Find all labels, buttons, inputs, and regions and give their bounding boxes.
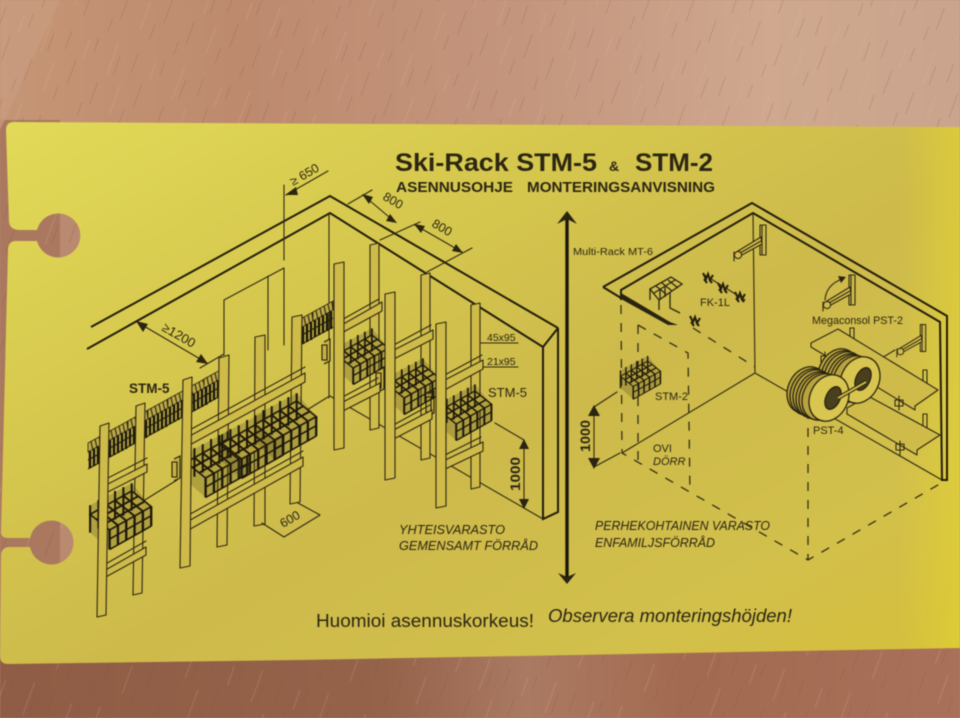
caption: family storage: [595, 518, 770, 550]
dimension: 800 spacing: [348, 189, 472, 272]
title: [395, 149, 713, 177]
wall consoles PST-2: [734, 225, 927, 428]
central divider arrow: [557, 211, 577, 584]
dimension: 1000: [577, 392, 620, 469]
footer note: Observera monteringshöjden!: [548, 606, 792, 626]
dimension: 1000: [495, 423, 529, 509]
rack STM-2: [620, 356, 660, 399]
dimension: minimum 1200: [136, 320, 224, 368]
dimension: minimum 650: [284, 161, 328, 260]
door outline: [224, 268, 284, 355]
caption: shared storage: [399, 522, 538, 553]
dashed floor and door outline: [621, 305, 943, 560]
left diagram: shared storage STM-5: [87, 161, 558, 617]
dimension: 1000: 1000: [507, 457, 523, 491]
dimension: minimum 1200: ≥1200: [160, 320, 198, 351]
shelves: [811, 329, 940, 455]
label: door: OVI: [653, 443, 672, 455]
dimension: 1000: 1000: [577, 420, 593, 452]
footer note: [316, 606, 792, 631]
title: Ski-Rack STM-5: [395, 149, 597, 177]
room walls: [87, 196, 558, 519]
label: Megaconsol PST-2: Megaconsol PST-2: [812, 315, 903, 327]
subtitle: ASENNUSOHJE: [396, 180, 513, 196]
right rack assemblies: [322, 243, 491, 508]
yellow instruction card: [0, 122, 960, 664]
room walls: [603, 203, 947, 480]
tires PST-4: [780, 342, 887, 428]
right diagram: family storage: [573, 203, 947, 560]
dimension: 600: 600: [278, 508, 303, 531]
label: Multi-Rack MT-6: Multi-Rack MT-6: [573, 246, 653, 258]
caption: shared storage: YHTEISVARASTO: [399, 522, 505, 537]
title: &: [609, 158, 619, 174]
hooks FK-1L: [690, 273, 745, 326]
dimension: 800 spacing: 800: [380, 189, 406, 212]
dimension: 800 spacing: 800: [430, 216, 455, 239]
label: door: [653, 443, 685, 468]
dimension: minimum 650: ≥ 650: [288, 161, 322, 189]
caption: shared storage: GEMENSAMT FÖRRÅD: [399, 538, 538, 553]
dimension: 600: [262, 503, 320, 537]
caption: family storage: PERHEKOHTAINEN VARASTO: [595, 518, 770, 533]
label: STM-5 right: STM-5: [488, 385, 527, 400]
subtitle: [396, 180, 715, 196]
left rack assembly: [90, 403, 151, 617]
label: STM-2: STM-2: [655, 391, 688, 403]
label: 21x95: 21x95: [487, 356, 516, 368]
label: 45x95: 45x95: [487, 332, 516, 344]
multi-rack MT-6: [650, 277, 682, 313]
label: FK-1L: FK-1L: [700, 297, 730, 309]
caption: family storage: ENFAMILJSFÖRRÅD: [595, 535, 715, 550]
footer note: Huomioi asennuskorkeus!: [316, 611, 534, 631]
label: PST-4: PST-4: [813, 425, 844, 437]
label: STM-5 left: STM-5: [129, 381, 170, 396]
wall-mounted rack strip: [88, 301, 333, 469]
title: STM-2: [635, 149, 713, 177]
centre rack assembly: [172, 315, 316, 568]
label: door: DÖRR: [653, 456, 685, 468]
subtitle: MONTERINGSANVISNING: [527, 180, 715, 196]
